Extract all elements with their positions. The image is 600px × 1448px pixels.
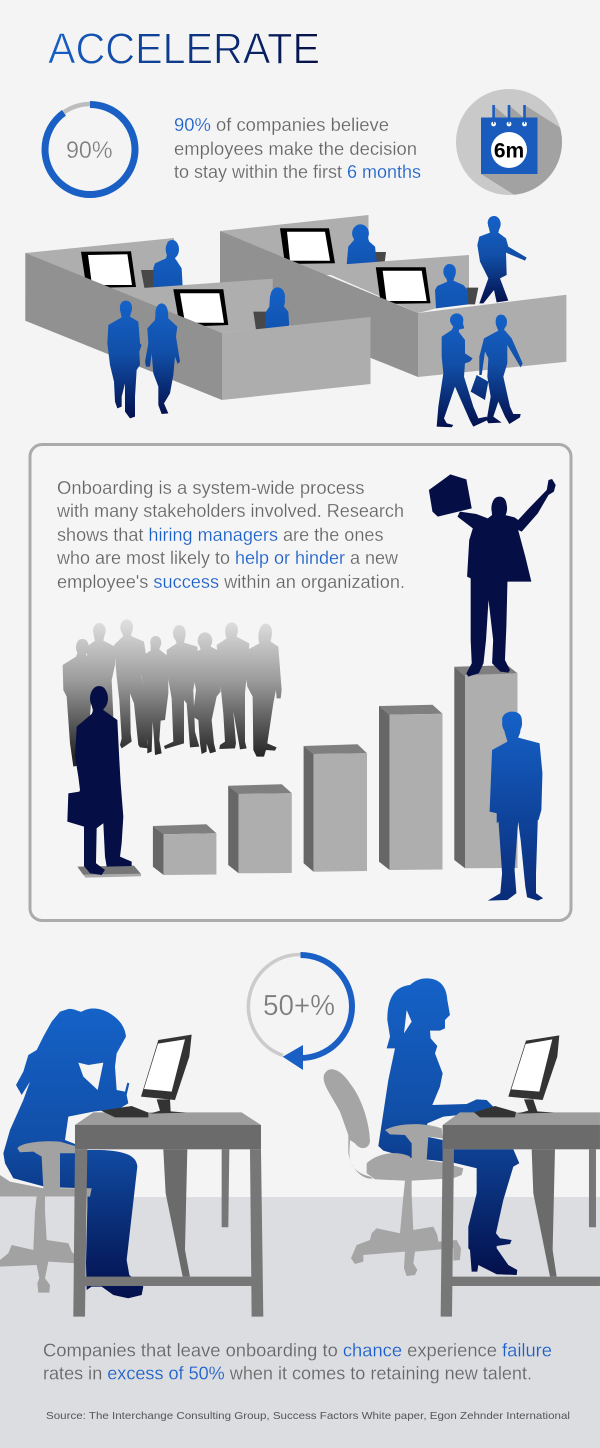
illustration: right cubicle row [220, 215, 566, 377]
text block: 90 percent statement: employees make the decision [174, 138, 417, 159]
text block: onboarding: who are most likely to help or hinder a new [56, 547, 399, 568]
crowd silhouettes [63, 619, 282, 767]
people walking: right pair [437, 313, 523, 427]
text block: onboarding [56, 477, 405, 592]
donut chart: 90%: 90% [66, 137, 112, 164]
blue man standing [488, 712, 543, 901]
keyboard [101, 1106, 148, 1117]
panel: onboarding [30, 444, 571, 920]
seated worker [141, 240, 183, 291]
focused woman silhouette [378, 978, 519, 1275]
text block: failure rates: Companies that leave onboarding to chance experience failure [43, 1340, 552, 1360]
manager with briefcase on platform [67, 686, 141, 878]
text block: 90 percent statement [174, 114, 421, 182]
donut chart: 90% [44, 104, 136, 195]
bar chart: rising columns [153, 665, 518, 875]
stressed woman silhouette [3, 1009, 143, 1298]
chair seat and base [351, 1124, 463, 1276]
monitor [508, 1035, 559, 1114]
seated worker [435, 264, 478, 308]
walking man, behind wall [477, 216, 527, 303]
desk [441, 1112, 600, 1317]
title: ACCELERATE [48, 24, 320, 74]
text block: onboarding: Onboarding is a system-wide process [57, 477, 364, 498]
seated worker [253, 287, 289, 329]
scene: focused worker at desk [324, 978, 600, 1317]
monitor [81, 251, 136, 288]
source line: Source: The Interchange Consulting Group, Success Factors White paper, Egon Zehnder International [46, 1410, 570, 1422]
monitor [173, 289, 228, 327]
keyboard [474, 1106, 516, 1117]
victorious man on top column [429, 474, 556, 677]
floor band [0, 1197, 600, 1448]
desk [73, 1112, 263, 1317]
circular arrow: 50+%: 50+% [263, 990, 335, 1022]
scene: stressed worker at desk [0, 1009, 263, 1317]
monitor [376, 267, 430, 304]
monitor [280, 228, 335, 264]
office chair [0, 1141, 92, 1293]
text block: 90 percent statement: 90% of companies believe [174, 114, 389, 135]
monitor [141, 1035, 192, 1114]
icon: calendar 6 months [456, 89, 562, 195]
icon: calendar 6 months: 6m [494, 140, 524, 162]
text block: onboarding: shows that hiring managers are the ones [57, 524, 384, 545]
office chair back [324, 1069, 373, 1179]
text block: 90 percent statement: to stay within the first 6 months [174, 161, 421, 182]
people walking: left pair [107, 301, 180, 418]
circular arrow: 50+% [248, 954, 352, 1070]
text block: onboarding: with many stakeholders involved. Research [56, 500, 404, 521]
text block: failure rates [43, 1340, 552, 1384]
seated worker [346, 224, 386, 268]
text block: onboarding: employee's success within an organization. [57, 571, 405, 592]
illustration: left cubicle row [25, 238, 371, 400]
text block: failure rates: rates in excess of 50% when it comes to retaining new talent. [43, 1362, 532, 1384]
